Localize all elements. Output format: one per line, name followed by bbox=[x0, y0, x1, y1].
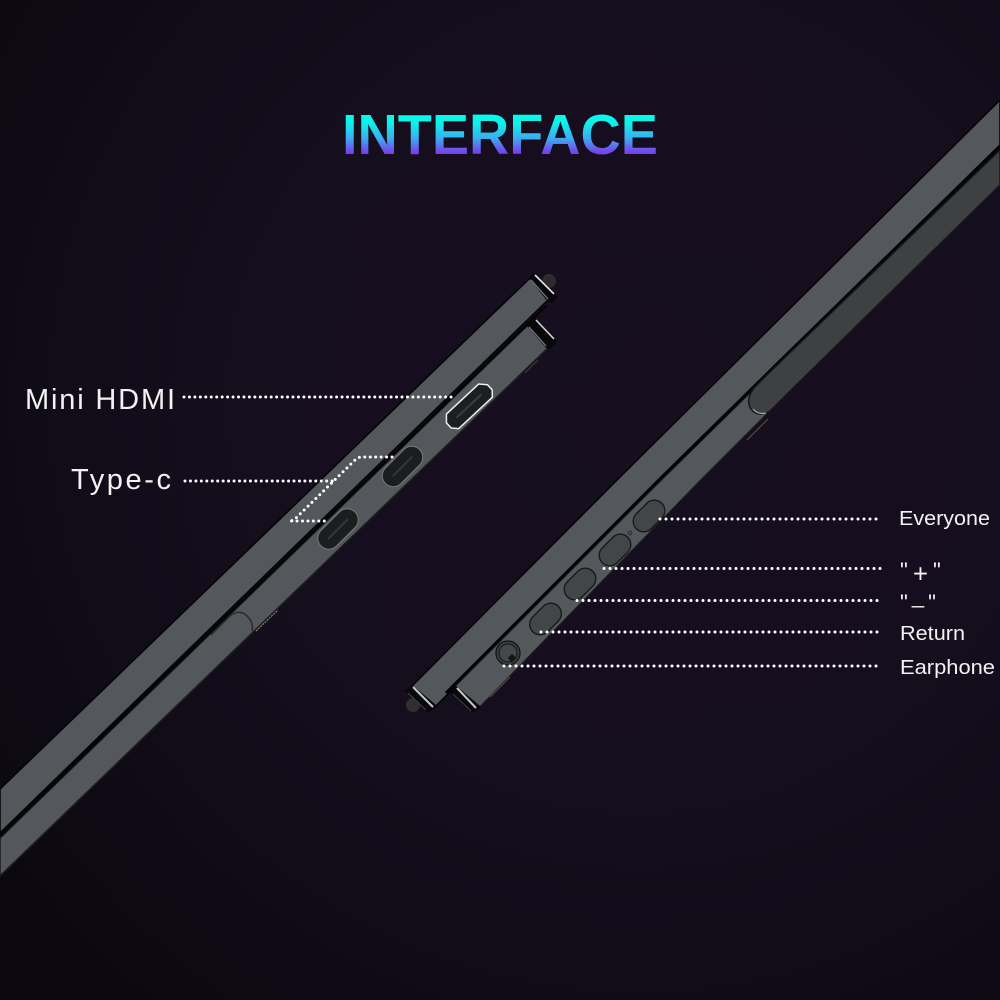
label: Everyone: Everyone bbox=[899, 508, 990, 530]
callout line: type-c bbox=[185, 457, 392, 521]
lower bar bbox=[455, 149, 1000, 707]
indicator dot bbox=[628, 531, 632, 535]
hinge dark section bbox=[749, 150, 1000, 414]
port: type-c upper bbox=[378, 442, 427, 491]
callout line: everyone bbox=[660, 518, 881, 520]
knob on bottom end bbox=[406, 698, 420, 712]
gap between bars bbox=[0, 306, 546, 836]
earphone jack bbox=[496, 641, 520, 665]
callout line: return bbox=[541, 630, 881, 634]
top end cap upper bbox=[529, 273, 557, 303]
callout line: minus bbox=[577, 599, 881, 602]
panel: left monitor side view bbox=[0, 273, 557, 876]
callout line: mini HDMI bbox=[184, 396, 455, 398]
label: Type-c: Type-c bbox=[71, 464, 171, 496]
upper bar bbox=[412, 100, 1000, 706]
callout line: plus bbox=[604, 567, 881, 570]
knob on top end bbox=[542, 274, 556, 288]
label: plus: + bbox=[913, 558, 933, 588]
label: Mini HDMI: Mini HDMI bbox=[25, 384, 175, 416]
top end cap lower bbox=[527, 318, 557, 349]
title: INTERFACE bbox=[342, 103, 658, 167]
label: plus: " bbox=[900, 558, 913, 583]
hinge highlight bbox=[753, 409, 766, 414]
bottom end cap upper bbox=[405, 685, 437, 713]
port: mini HDMI bbox=[442, 380, 496, 432]
label: Return: Return bbox=[900, 623, 965, 645]
label: plus: " bbox=[933, 558, 946, 583]
panel: right monitor side view bbox=[405, 100, 1000, 713]
button: return bbox=[525, 599, 566, 639]
button: plus bbox=[595, 530, 635, 570]
callout line: earphone bbox=[504, 664, 881, 668]
label: minus: " bbox=[900, 590, 912, 615]
copper accent bbox=[256, 610, 278, 631]
button: everyone bbox=[629, 496, 669, 536]
upper bar bbox=[0, 278, 548, 833]
gap between bars bbox=[446, 147, 1000, 693]
lower bar bbox=[0, 325, 549, 876]
label: Earphone: Earphone bbox=[900, 657, 995, 679]
button: minus bbox=[560, 564, 600, 604]
hinge pill outline bbox=[211, 612, 252, 635]
bottom end cap lower bbox=[450, 686, 481, 713]
port: type-c lower bbox=[313, 504, 363, 554]
label: minus: " bbox=[928, 590, 940, 615]
label: minus: _ bbox=[911, 583, 928, 608]
copper accent bbox=[747, 419, 768, 440]
